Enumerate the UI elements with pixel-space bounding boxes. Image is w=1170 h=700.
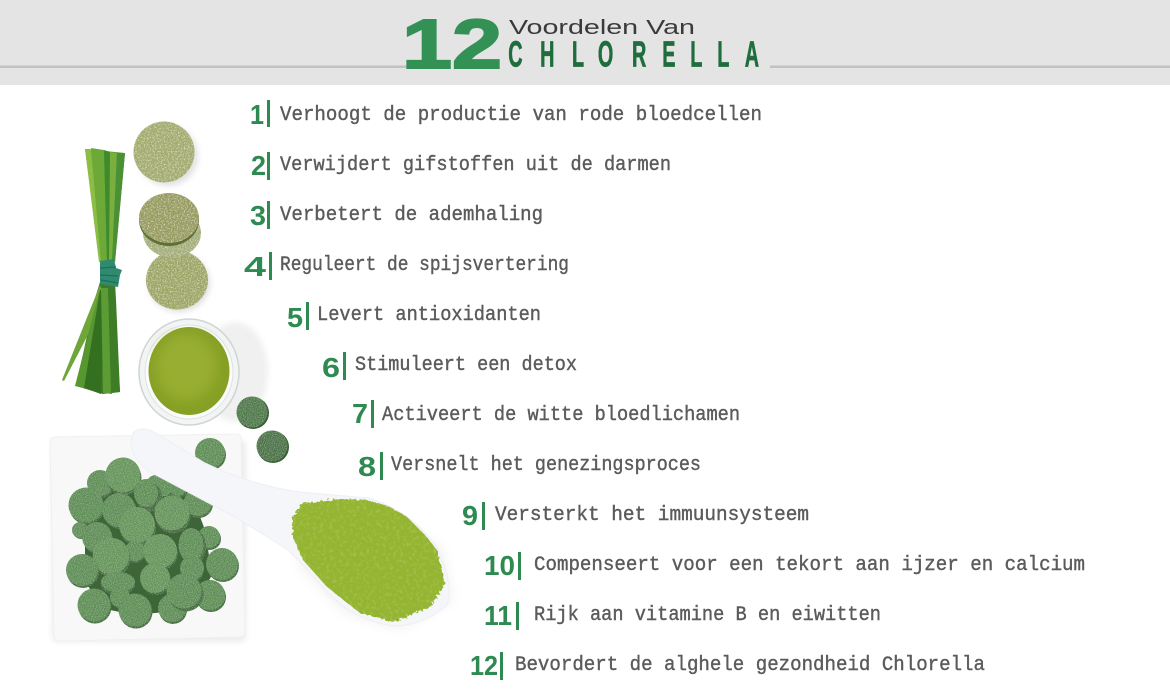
title <box>402 5 759 83</box>
title line: Chlorella: CHLORELLA <box>508 36 759 75</box>
benefit 10: 10 <box>484 550 515 581</box>
benefit 9 <box>462 500 809 531</box>
illustration: dark tablets <box>236 396 289 463</box>
benefit 6 <box>322 352 577 383</box>
benefit 1: 1 <box>250 99 264 130</box>
illustration: wheatgrass bundle <box>62 148 125 394</box>
title number 12: 12 <box>402 5 502 83</box>
benefit 9: Versterkt het immuunsysteem <box>495 504 809 527</box>
benefit 3: Verbetert de ademhaling <box>280 204 543 227</box>
grass tie <box>100 259 122 287</box>
benefit 2: 2 <box>251 150 266 181</box>
benefit 12 <box>470 650 985 681</box>
benefit 2 <box>251 150 671 181</box>
benefit 4 <box>244 251 569 282</box>
benefit 11: Rijk aan vitamine B en eiwitten <box>534 604 881 627</box>
benefit 10 <box>484 550 1085 581</box>
benefit 7: 7 <box>352 398 368 429</box>
benefit 5: 5 <box>287 302 303 333</box>
benefit 12: Bevordert de alghele gezondheid Chlorella <box>515 654 985 677</box>
illustration: spoon with green powder <box>131 429 452 628</box>
header band <box>0 0 1170 85</box>
illustration: dish of tablets <box>50 434 246 642</box>
benefit 11: 11 <box>484 600 512 631</box>
benefit 3: 3 <box>250 200 266 231</box>
benefit 7: Activeert de witte bloedlichamen <box>382 404 740 427</box>
benefit 4: Reguleert de spijsvertering <box>280 254 569 277</box>
benefit 6: 6 <box>322 352 340 383</box>
illustration: glass of green juice <box>139 319 268 425</box>
title line: Voordelen Van: Voordelen Van <box>509 17 695 39</box>
benefit 9: 9 <box>462 500 478 531</box>
benefit 8: 8 <box>358 451 376 482</box>
benefit 8: Versnelt het genezingsproces <box>391 454 701 477</box>
benefit 1: Verhoogt de productie van rode bloedcellen <box>280 104 762 127</box>
benefit 8 <box>358 451 701 482</box>
benefit 5 <box>287 302 541 333</box>
green powder <box>292 499 445 622</box>
benefit 11 <box>484 600 881 631</box>
benefit 5: Levert antioxidanten <box>317 304 541 327</box>
benefit 4: 4 <box>244 251 267 282</box>
benefit 12: 12 <box>470 650 498 681</box>
benefit 10: Compenseert voor een tekort aan ijzer en calcium <box>534 554 1085 577</box>
benefit 1 <box>250 99 762 130</box>
benefit 3 <box>250 200 543 231</box>
benefit 6: Stimuleert een detox <box>355 354 577 377</box>
illustration: light tablets <box>134 122 210 312</box>
benefit 7 <box>352 398 740 429</box>
benefit 2: Verwijdert gifstoffen uit de darmen <box>280 154 671 177</box>
